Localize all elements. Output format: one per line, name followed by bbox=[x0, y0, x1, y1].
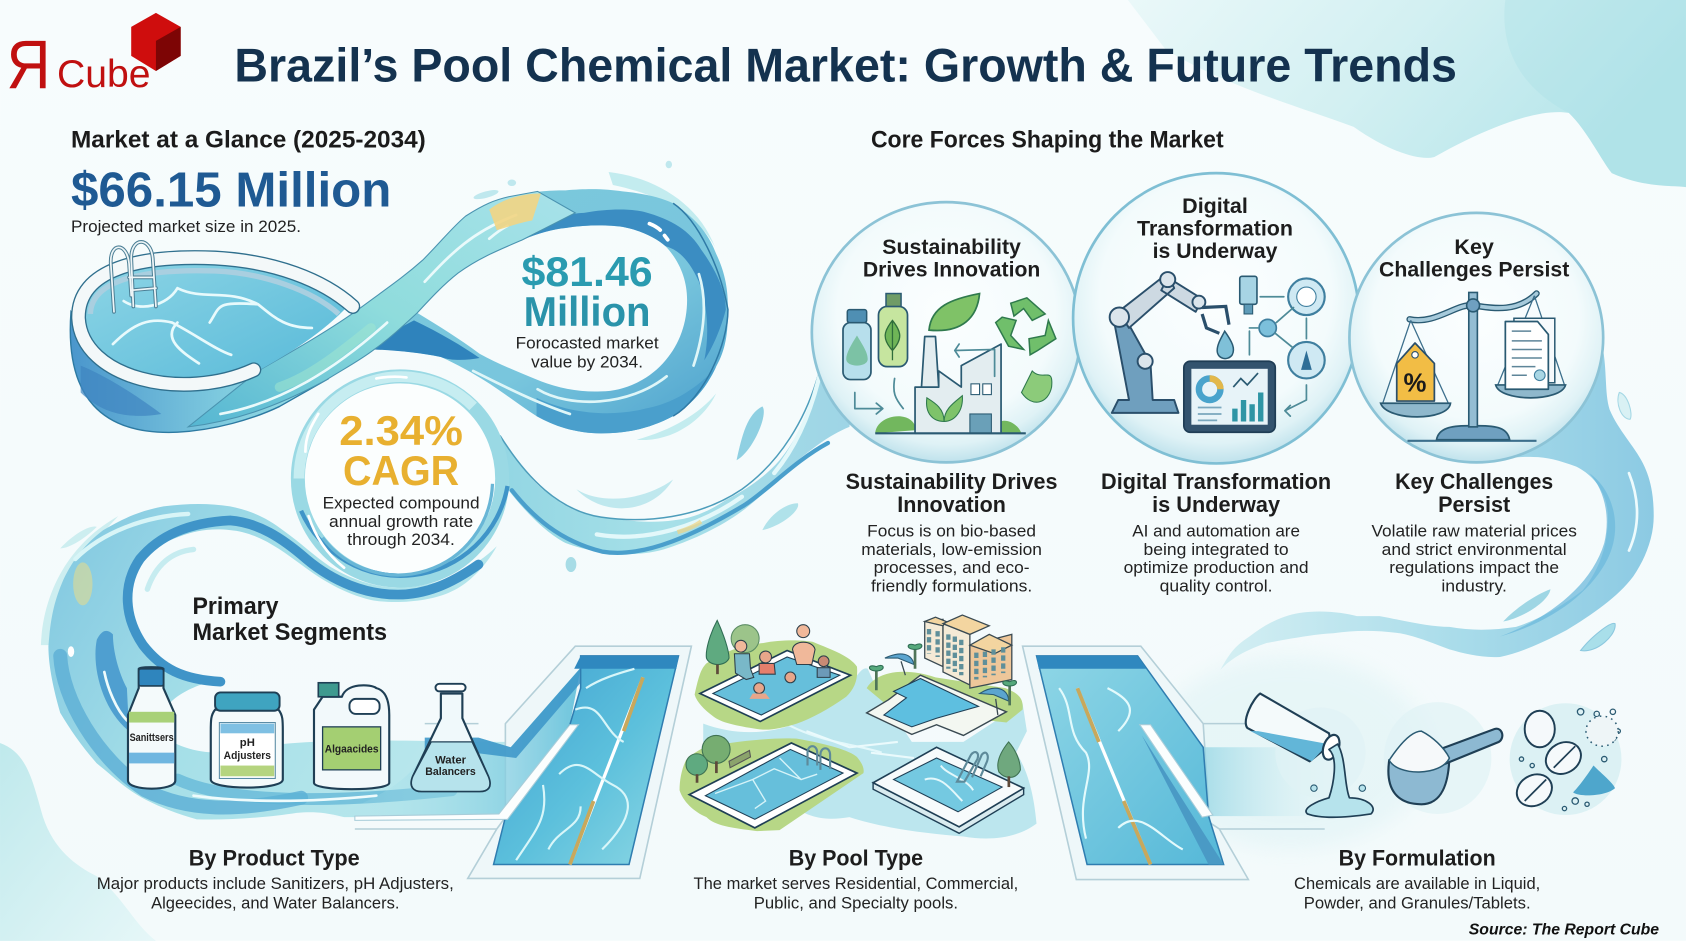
text block: sustainability: Innovation bbox=[897, 492, 1006, 517]
icon: algaecide jug bbox=[314, 683, 389, 789]
text block: key challenges: and strict environmental bbox=[1382, 540, 1567, 559]
logo: RCube: Cube bbox=[57, 53, 151, 96]
title: Brazil’s Pool Chemical Market: Growth & Future Trends bbox=[234, 40, 1457, 93]
icon: balancer flask bbox=[411, 684, 490, 791]
stat: 2034 forecast bbox=[516, 248, 659, 372]
illustration: swimming pool bbox=[70, 191, 575, 432]
text block: digital transformation: quality control. bbox=[1160, 576, 1273, 595]
icon: balancer flask: Water bbox=[435, 754, 467, 766]
logo: RCube bbox=[6, 13, 181, 103]
stat: 2034 forecast: value by 2034. bbox=[531, 353, 643, 372]
stat: CAGR: annual growth rate bbox=[329, 512, 473, 531]
text block: by formulation: By Formulation bbox=[1339, 846, 1496, 871]
logo: RCube: Я bbox=[6, 26, 51, 103]
water ribbon: infinity loop back band bbox=[355, 172, 728, 440]
icon: tablet dashboard bbox=[1184, 361, 1275, 432]
heading: market at a glance: Market at a Glance (2025-2034) bbox=[71, 127, 426, 153]
text block: digital transformation: is Underway bbox=[1152, 492, 1281, 517]
text block: by formulation bbox=[1294, 846, 1540, 913]
heading: primary market segments: Market Segments bbox=[192, 620, 387, 646]
water ribbon: diagonal bbox=[188, 191, 575, 427]
icon: sanitizer bottle bbox=[128, 667, 175, 789]
stat: CAGR bbox=[323, 407, 480, 549]
text block: digital transformation bbox=[1101, 469, 1331, 595]
icon: formulation row bbox=[1246, 694, 1621, 817]
text block: sustainability: materials, low-emission bbox=[861, 540, 1042, 559]
icon: sensors and gauges bbox=[1240, 276, 1325, 416]
heading: core forces: Core Forces Shaping the Market bbox=[871, 127, 1224, 153]
panel: challenges bubble: Challenges Persist bbox=[1379, 257, 1569, 281]
text block: by product type bbox=[97, 846, 454, 913]
text block: key challenges: Persist bbox=[1438, 492, 1511, 517]
text block: digital transformation: being integrated to bbox=[1144, 540, 1289, 559]
icon: pH adjuster jar: pH bbox=[240, 737, 255, 749]
icon: hotel pool bbox=[867, 615, 1023, 735]
water ribbon: flow toward forces bbox=[466, 258, 860, 554]
text block: sustainability bbox=[846, 469, 1058, 595]
panel: digital bubble: Digital bbox=[1182, 194, 1248, 218]
stat: CAGR: CAGR bbox=[343, 447, 459, 494]
icon: specialty pool bbox=[873, 742, 1024, 833]
panel: digital bubble bbox=[1073, 173, 1359, 463]
icon: documents bbox=[1505, 318, 1555, 389]
icon: recycle bbox=[996, 298, 1056, 355]
stat: 2034 forecast: Million bbox=[524, 288, 651, 335]
panel: sustainability bubble: Drives Innovation bbox=[863, 257, 1040, 281]
text block: digital transformation: Digital Transformation bbox=[1101, 469, 1331, 494]
heading: primary market segments bbox=[192, 594, 387, 646]
icon: balancer flask: Balancers bbox=[425, 766, 476, 778]
text block: digital transformation: optimize production and bbox=[1124, 558, 1309, 577]
text block: by formulation: Powder, and Granules/Tablets. bbox=[1304, 894, 1531, 913]
text block: key challenges: regulations impact the bbox=[1389, 558, 1559, 577]
text block: by pool type: Public, and Specialty pools. bbox=[754, 894, 958, 913]
panel: sustainability bubble bbox=[812, 202, 1081, 462]
stat: CAGR: through 2034. bbox=[347, 530, 455, 549]
panel: digital bubble: is Underway bbox=[1153, 239, 1277, 263]
text block: sustainability: friendly formulations. bbox=[871, 576, 1032, 595]
icon: factory bbox=[855, 337, 1052, 433]
panel: sustainability bubble: Sustainability bbox=[882, 235, 1021, 259]
pool lane: right bbox=[1023, 646, 1333, 880]
text block: by pool type: By Pool Type bbox=[789, 846, 923, 871]
icon: pH adjuster jar bbox=[211, 692, 283, 788]
icon: leaf bbox=[929, 294, 980, 331]
water ribbon: left swoosh bbox=[41, 504, 505, 820]
text block: by pool type: The market serves Residential, Commercial, bbox=[694, 874, 1018, 893]
panel: digital bubble: Transformation bbox=[1137, 216, 1293, 240]
stat: 2034 forecast: Forocasted market bbox=[516, 333, 659, 352]
text block: key challenges: Volatile raw material prices bbox=[1371, 522, 1577, 541]
text block: digital transformation: AI and automation are bbox=[1132, 522, 1300, 541]
icon: price tag bbox=[1397, 343, 1434, 401]
icon: liquid bottle bbox=[1246, 694, 1373, 817]
illustration: pool types bbox=[680, 615, 1037, 838]
water ribbon: right swoosh bbox=[1220, 344, 1654, 670]
icon: algaecide jug: Algaacides bbox=[325, 744, 379, 756]
icon: tablets and granules bbox=[1511, 709, 1620, 812]
icon: robot arm bbox=[1110, 272, 1233, 413]
stat: 2025 market size: $66.15 Million bbox=[71, 162, 391, 217]
icon: powder scoop bbox=[1388, 729, 1502, 804]
stat: 2034 forecast: $81.46 bbox=[522, 248, 653, 295]
source note: Source: The Report Cube bbox=[1469, 920, 1659, 938]
water ring: CAGR bbox=[298, 376, 508, 581]
icon: sanitizer bottle: Sanittsers bbox=[130, 732, 174, 744]
text block: by formulation: Chemicals are available in Liquid, bbox=[1294, 874, 1540, 893]
text block: key challenges bbox=[1371, 469, 1577, 595]
icon: pH adjuster jar: Adjusters bbox=[224, 750, 271, 762]
text block: by product type: Algeecides, and Water Balancers. bbox=[151, 894, 399, 913]
icon: balance scale bbox=[1381, 292, 1566, 441]
text block: key challenges: Key Challenges bbox=[1395, 469, 1553, 494]
text block: by pool type bbox=[694, 846, 1018, 913]
text block: sustainability: processes, and eco- bbox=[874, 558, 1030, 577]
icon: product row bbox=[128, 667, 490, 791]
icon: public pool bbox=[680, 735, 864, 831]
icon: residential pool bbox=[695, 620, 857, 730]
text block: key challenges: industry. bbox=[1441, 576, 1507, 595]
icon: bottles bbox=[843, 294, 908, 380]
heading: primary market segments: Primary bbox=[192, 594, 279, 620]
text block: by product type: By Product Type bbox=[189, 846, 360, 871]
water drops and splashes bbox=[473, 161, 798, 572]
text block: sustainability: Focus is on bio-based bbox=[867, 522, 1036, 541]
pool lane: left bbox=[323, 646, 691, 878]
icon: price tag: % bbox=[1404, 369, 1427, 397]
panel: challenges bubble bbox=[1349, 213, 1603, 462]
stat: CAGR: Expected compound bbox=[323, 494, 480, 513]
stat: CAGR: 2.34% bbox=[339, 407, 463, 454]
panel: challenges bubble: Key bbox=[1454, 235, 1494, 259]
text block: sustainability: Sustainability Drives bbox=[846, 469, 1058, 494]
stat: 2025 market size: Projected market size in 2025. bbox=[71, 217, 301, 236]
text block: by product type: Major products include Sanitizers, pH Adjusters, bbox=[97, 874, 454, 893]
